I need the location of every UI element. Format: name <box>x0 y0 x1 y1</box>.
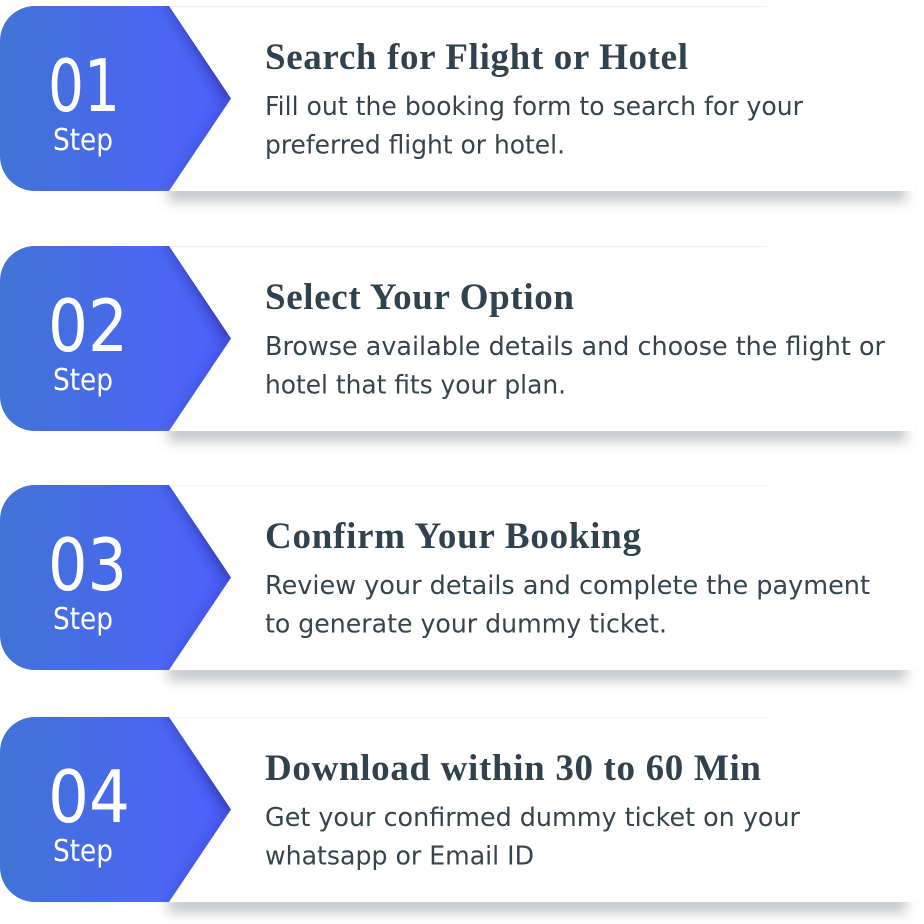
card shadow <box>168 893 906 913</box>
card top line <box>170 246 767 247</box>
description: hotel that fits your plan. <box>265 370 566 400</box>
description: whatsapp or Email ID <box>265 842 534 872</box>
step label: Step <box>53 123 113 158</box>
description: Browse available details and choose the flight or <box>265 332 886 362</box>
badge edge shade <box>164 485 231 666</box>
badge <box>0 246 231 431</box>
badge <box>0 717 231 902</box>
step label: Step <box>53 363 113 398</box>
step number: 01 <box>48 44 120 128</box>
heading: Download within 30 to 60 Min <box>265 748 761 789</box>
heading: Select Your Option <box>265 277 574 318</box>
card <box>150 717 915 902</box>
description: to generate your dummy ticket. <box>265 610 667 640</box>
card shadow <box>168 661 906 681</box>
card <box>150 6 915 191</box>
step number: 04 <box>48 755 130 839</box>
badge edge shade <box>164 717 231 898</box>
step label: Step <box>53 602 113 637</box>
badge edge shade <box>164 6 231 187</box>
heading: Search for Flight or Hotel <box>265 37 688 78</box>
step number: 02 <box>48 284 128 368</box>
card shadow <box>168 422 906 442</box>
card <box>150 485 915 670</box>
card shadow <box>168 182 906 202</box>
panel: step 1 <box>0 0 915 202</box>
description: preferred flight or hotel. <box>265 130 565 160</box>
panel: step 3 <box>0 475 915 681</box>
step label: Step <box>53 834 113 869</box>
badge <box>0 6 231 191</box>
description: Get your confirmed dummy ticket on your <box>265 803 801 833</box>
card top line <box>170 717 767 718</box>
card <box>150 246 915 431</box>
card top line <box>170 6 767 7</box>
badge <box>0 485 231 670</box>
description: Fill out the booking form to search for your <box>265 92 803 122</box>
description: Review your details and complete the payment <box>265 571 870 601</box>
badge edge shade <box>164 246 231 427</box>
step number: 03 <box>48 523 127 607</box>
panel: step 2 <box>0 236 915 442</box>
panel: step 4 <box>0 707 915 913</box>
card top line <box>170 485 767 486</box>
heading: Confirm Your Booking <box>265 516 642 557</box>
